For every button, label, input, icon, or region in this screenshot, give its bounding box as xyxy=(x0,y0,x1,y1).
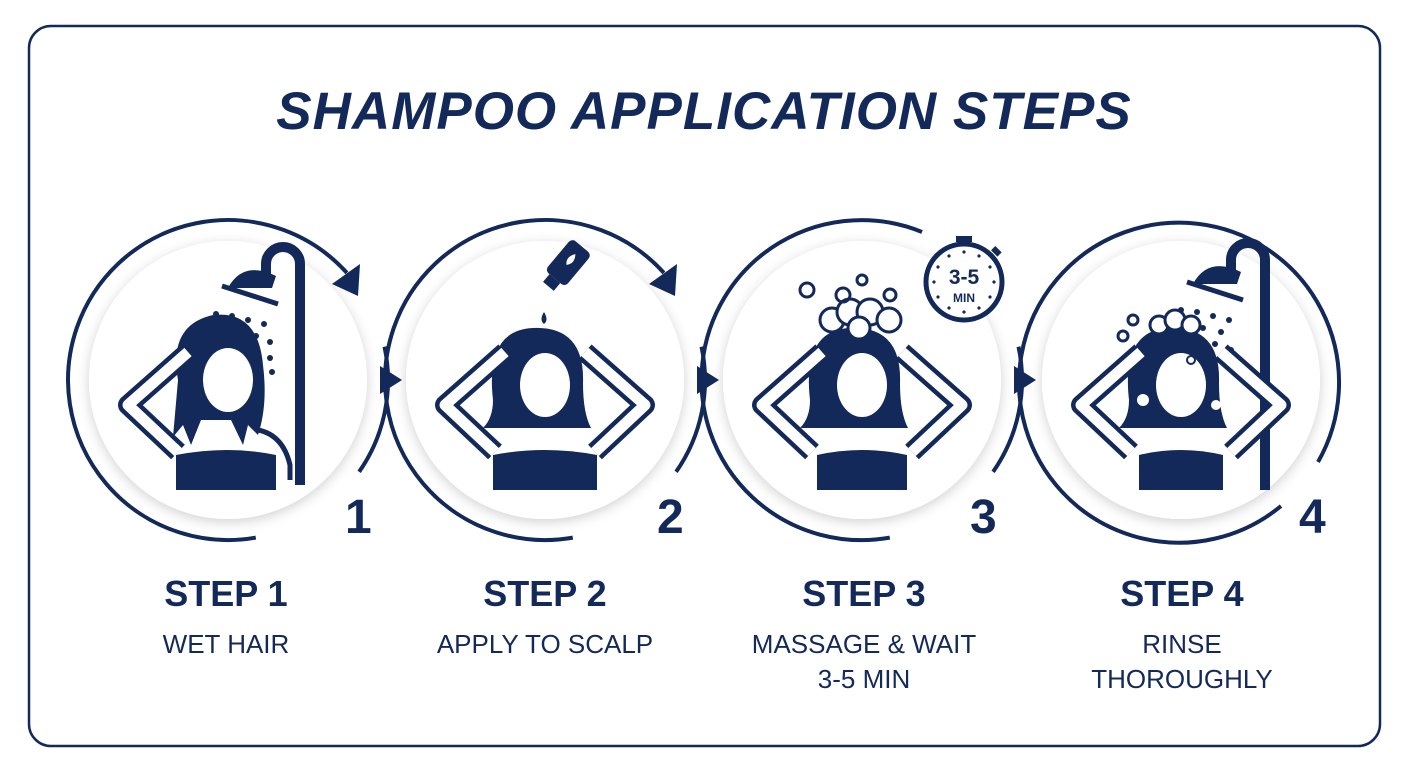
inner circle xyxy=(723,241,1001,519)
inner circle xyxy=(1042,241,1320,519)
icon: timer 3-5 min xyxy=(926,236,1002,320)
label step 3: 3-5 MIN xyxy=(818,664,910,694)
step 4 xyxy=(1019,223,1339,544)
ring 3 xyxy=(702,220,1022,540)
label step 2: APPLY TO SCALP xyxy=(437,629,653,659)
inner circle xyxy=(89,241,367,519)
label step 2 xyxy=(437,573,653,659)
number 3: 3 xyxy=(970,491,997,544)
title: SHAMPOO APPLICATION STEPS xyxy=(276,82,1132,141)
arrows xyxy=(649,264,719,394)
ring 4 xyxy=(1019,223,1339,543)
arrow xyxy=(1014,366,1036,394)
icon: timer 3-5 min: 3-5 xyxy=(949,266,979,289)
number 2: 2 xyxy=(657,491,684,544)
number 1: 1 xyxy=(345,491,372,544)
label step 4: THOROUGHLY xyxy=(1091,664,1273,694)
label step 4: RINSE xyxy=(1142,629,1222,659)
step labels xyxy=(163,573,1273,694)
label step 1 xyxy=(163,573,289,659)
label step 4: STEP 4 xyxy=(1120,573,1244,614)
label step 3: STEP 3 xyxy=(802,573,926,614)
label step 1: STEP 1 xyxy=(164,573,288,614)
label step 3: MASSAGE & WAIT xyxy=(752,629,976,659)
number 4: 4 xyxy=(1299,491,1326,544)
icon: woman under shower xyxy=(128,247,300,490)
label step 4 xyxy=(1091,573,1273,694)
label step 1: WET HAIR xyxy=(163,629,289,659)
label step 3 xyxy=(752,573,976,694)
inner circle xyxy=(406,241,684,519)
icon: massaging with lather xyxy=(762,275,962,490)
step 3 xyxy=(702,220,1036,544)
icon: applying shampoo xyxy=(445,238,645,490)
icon: rinsing under shower xyxy=(1081,243,1281,490)
ring 2 xyxy=(385,220,705,540)
label step 2: STEP 2 xyxy=(483,573,607,614)
step 2 xyxy=(385,220,719,544)
icon: timer 3-5 min: MIN xyxy=(953,291,975,305)
arrows xyxy=(332,264,402,394)
step 1 xyxy=(68,220,402,544)
ring 1 xyxy=(68,220,388,540)
